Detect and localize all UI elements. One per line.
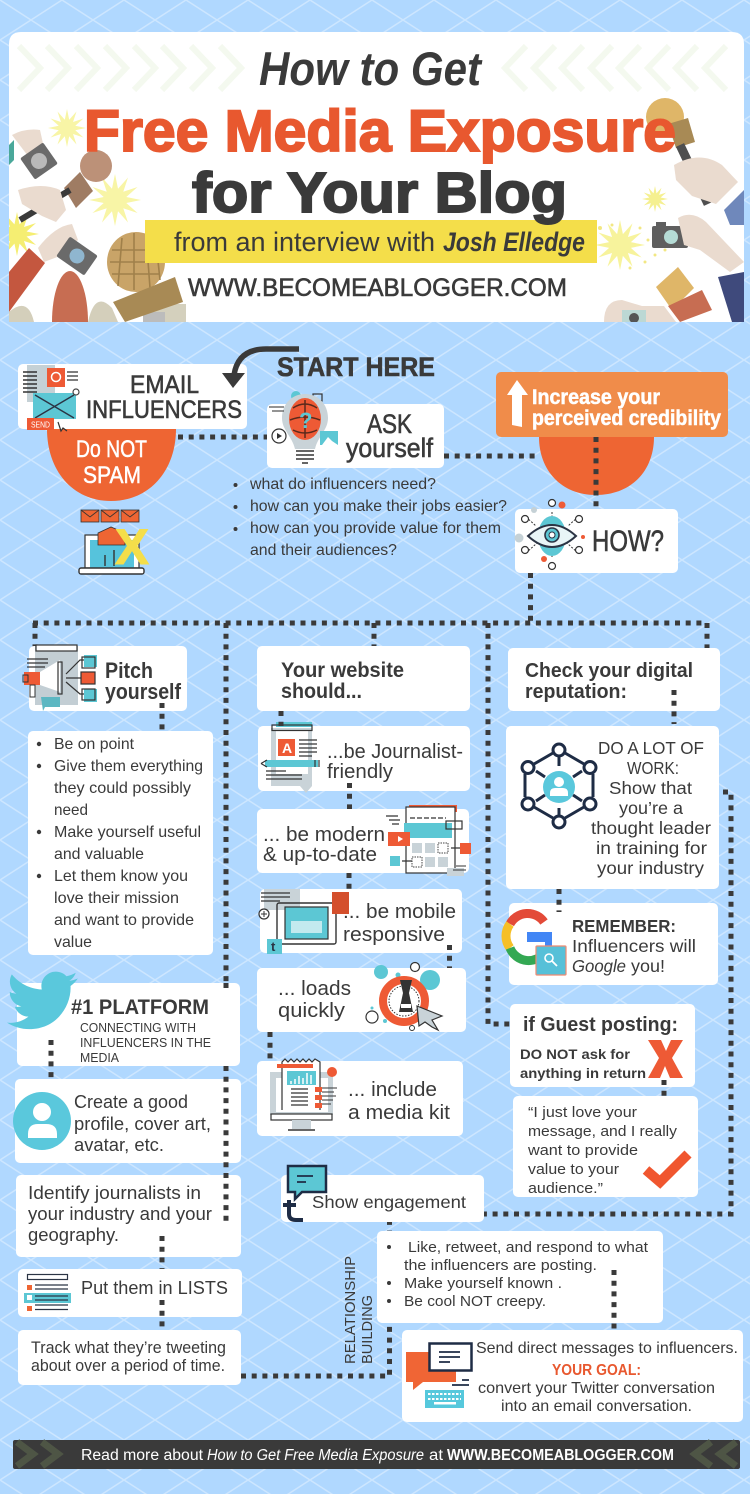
panel: do a lot of work [506, 726, 719, 889]
panel: create profile: avatar, etc. [74, 1135, 164, 1155]
panel: journalist friendly [258, 722, 470, 793]
panel: loads quickly: ... loads [278, 978, 351, 1000]
panel: email influencers: INFLUENCERS [86, 396, 242, 424]
panel: create profile [13, 1079, 241, 1163]
panel: identify journalists: your industry and your [28, 1204, 212, 1224]
panel: quote: message, and I really [528, 1123, 678, 1140]
panel: mobile responsive [259, 889, 462, 954]
panel: pitch tips: Make yourself useful [54, 824, 201, 841]
panel: if guest posting [510, 1004, 695, 1087]
icon: orange x [648, 1040, 683, 1078]
icon: spam laptop: X [115, 519, 149, 575]
panel: create profile: profile, cover art, [74, 1114, 211, 1134]
panel: do not spam half circle: SPAM [83, 462, 141, 489]
panel: pitch tips [28, 731, 213, 955]
bullet list: questions to ask: and their audiences? [250, 542, 397, 559]
panel: do not spam half circle: Do NOT [76, 436, 147, 463]
panel: send direct messages [402, 1330, 743, 1422]
label: relationship building: RELATIONSHIP [342, 1256, 359, 1364]
panel: pitch tips: Be on point [54, 736, 135, 753]
panel: if guest posting: anything in return [520, 1065, 646, 1081]
panel: email influencers [18, 364, 247, 431]
icon: megaphone [23, 645, 97, 711]
panel: increase credibility: perceived credibility [532, 407, 721, 430]
title: Josh Elledge [443, 227, 585, 257]
heading: start here: START HERE [277, 352, 435, 382]
panel: identify journalists: geography. [28, 1225, 119, 1245]
panel: ask yourself: yourself [346, 433, 433, 463]
bullet list: questions to ask [234, 476, 507, 559]
panel: how: HOW? [592, 525, 664, 558]
icon: google search [506, 913, 566, 975]
panel: number one platform: CONNECTING WITH [80, 1020, 196, 1035]
panel: number one platform: INFLUENCERS IN THE [80, 1035, 211, 1050]
panel: send direct messages: convert your Twitter conversation [478, 1380, 715, 1397]
panel: track tweets: Track what they’re tweeting [31, 1339, 226, 1357]
icon: avatar [13, 1092, 71, 1150]
panel: media kit: a media kit [348, 1102, 450, 1124]
panel: media kit [257, 1059, 463, 1136]
panel: check digital reputation [508, 648, 720, 711]
panel: pitch tips: love their mission [54, 890, 179, 907]
icon: spam laptop [79, 510, 149, 575]
icon: email: SEND [31, 420, 50, 430]
bullet list: questions to ask: what do influencers need? [249, 476, 436, 493]
panel: your website should: should... [281, 680, 362, 703]
panel: put them in lists: Put them in LISTS [81, 1278, 228, 1298]
icon: lists [24, 1274, 71, 1311]
footer bar: Read more about [81, 1447, 204, 1464]
panel: check digital reputation: reputation: [525, 681, 627, 703]
icon: footer chevrons [17, 1442, 736, 1466]
icon: chat keyboard [406, 1344, 472, 1408]
icon: brain lightbulb: ? [299, 408, 312, 433]
icon: web layout [386, 805, 471, 876]
panel: relationship tips [377, 1231, 663, 1323]
panel: identify journalists [16, 1175, 241, 1257]
icon: tweet bubble [283, 1166, 326, 1220]
panel: media kit: ... include [348, 1079, 437, 1101]
panel: relationship tips: Like, retweet, and respond to what [408, 1239, 649, 1256]
panel: do a lot of work: you’re a [619, 798, 683, 818]
panel: send direct messages: into an email conversation. [501, 1398, 692, 1415]
icon: eye network [514, 500, 585, 570]
panel: number one platform: #1 PLATFORM [71, 996, 209, 1019]
connector: credibility to how [594, 437, 598, 510]
icon: article [261, 722, 319, 793]
panel: pitch yourself: yourself [105, 679, 182, 704]
panel: do a lot of work: thought leader [591, 818, 711, 838]
panel: create profile: Create a good [74, 1092, 188, 1112]
label: relationship building [342, 1256, 376, 1364]
icon: up arrow [507, 380, 528, 427]
panel: pitch tips: and valuable [54, 846, 144, 863]
footer bar: How to Get Free Media Exposure [207, 1447, 424, 1464]
panel: if guest posting: DO NOT ask for [520, 1046, 631, 1062]
panel: do a lot of work: Show that [609, 778, 692, 798]
panel: pitch tips: Let them know you [54, 868, 188, 885]
panel: quote [513, 1096, 698, 1197]
panel: quote: audience.” [528, 1180, 603, 1197]
label: relationship building: BUILDING [359, 1295, 376, 1364]
panel: remember google [506, 903, 718, 985]
panel: modern up to date: ... be modern [263, 824, 385, 846]
panel: number one platform [17, 983, 240, 1066]
panel: ask yourself [267, 391, 444, 468]
panel: quote: want to provide [527, 1142, 638, 1159]
panel: loads quickly: quickly [278, 1000, 345, 1022]
bullet list: questions to ask: how can you make their jobs easier? [250, 498, 507, 515]
panel: how [514, 500, 678, 573]
panel: do a lot of work: WORK: [627, 758, 679, 778]
icon: monitor receipt [270, 1059, 337, 1130]
panel: pitch tips: value [54, 934, 92, 951]
panel: pitch tips: they could possibly [54, 780, 191, 797]
icon: hourglass [366, 962, 442, 1030]
connectors in front of cards [51, 690, 674, 1330]
panel: relationship tips: Be cool NOT creepy. [404, 1293, 546, 1310]
footer bar [13, 1440, 740, 1469]
panel: journalist friendly: ...be Journalist- [327, 741, 463, 763]
icon: email [23, 365, 79, 431]
panel: do not spam half circle [47, 429, 176, 501]
panel: track tweets: about over a period of time. [31, 1357, 225, 1375]
icon: check mark [646, 1154, 688, 1182]
title [84, 42, 676, 302]
icon: brain lightbulb [269, 391, 338, 463]
panel: increase credibility [496, 372, 728, 437]
illustration: left press hands [9, 109, 186, 322]
bullet list: questions to ask: how can you provide value for them [250, 520, 501, 537]
panel: journalist friendly: friendly [327, 761, 393, 783]
panel: remember google: Influencers will [572, 936, 696, 956]
title: from an interview with [174, 227, 435, 257]
footer bar: WWW.BECOMEABLOGGER.COM [447, 1447, 674, 1464]
icon: twitter bird [7, 972, 78, 1029]
title: Free Media Exposure [84, 99, 676, 164]
panel: relationship tips: Make yourself known . [404, 1275, 562, 1292]
title: for Your Blog [192, 161, 567, 225]
icon: network person [522, 744, 596, 828]
arrow: start here [222, 349, 299, 388]
panel: do a lot of work: your industry [597, 858, 704, 878]
panel: do a lot of work: DO A LOT OF [598, 738, 704, 758]
panel: pitch yourself [23, 645, 187, 711]
panel: modern up to date: & up-to-date [263, 844, 377, 866]
panel: if guest posting: if Guest posting: [523, 1013, 678, 1036]
panel: modern up to date [257, 805, 471, 876]
panel: send direct messages: YOUR GOAL: [552, 1362, 641, 1379]
illustration: right press hands [595, 98, 744, 323]
panel: pitch tips: and want to provide [54, 912, 194, 929]
panel: show engagement: Show engagement [312, 1192, 466, 1212]
panel: do a lot of work: in training for [596, 838, 707, 858]
panel: increase credibility: Increase your [532, 386, 660, 409]
panel: remember google: Google [572, 956, 626, 976]
panel: pitch yourself: Pitch [105, 658, 153, 683]
subtitle band [145, 220, 597, 263]
connectors behind cards [33, 437, 731, 1376]
panel: credibility half circle [539, 437, 654, 495]
icon: tablet [259, 889, 349, 954]
panel: check digital reputation: Check your digital [525, 660, 693, 682]
panel: mobile responsive: responsive [343, 924, 445, 946]
panel: header [9, 32, 744, 322]
panel: quote: value to your [528, 1161, 619, 1178]
panel: loads quickly [257, 962, 466, 1032]
icon: tablet: t [271, 939, 276, 954]
panel: put them in lists [18, 1269, 242, 1317]
panel: identify journalists: Identify journalists in [28, 1183, 201, 1203]
title: How to Get [259, 42, 483, 95]
panel: relationship tips: the influencers are posting. [404, 1257, 597, 1274]
panel: quote: “I just love your [528, 1104, 637, 1121]
panel: number one platform: MEDIA [80, 1050, 119, 1065]
panel: pitch tips: need [54, 802, 88, 819]
title: WWW.BECOMEABLOGGER.COM [188, 274, 567, 302]
panel: email influencers: EMAIL [130, 371, 199, 399]
panel: pitch tips: Give them everything [54, 758, 203, 775]
panel: remember google: you! [631, 956, 665, 976]
panel: your website should: Your website [281, 659, 404, 682]
panel: remember google: REMEMBER: [572, 916, 676, 936]
footer bar: at [429, 1447, 444, 1464]
icon: article: A [282, 740, 292, 756]
panel: send direct messages: Send direct messages to influencers. [476, 1340, 738, 1357]
panel: ask yourself: ASK [367, 409, 412, 439]
panel: track tweets [18, 1330, 241, 1385]
panel: mobile responsive: ... be mobile [343, 901, 456, 923]
panel: your website should [257, 646, 470, 711]
panel: show engagement [281, 1166, 484, 1222]
